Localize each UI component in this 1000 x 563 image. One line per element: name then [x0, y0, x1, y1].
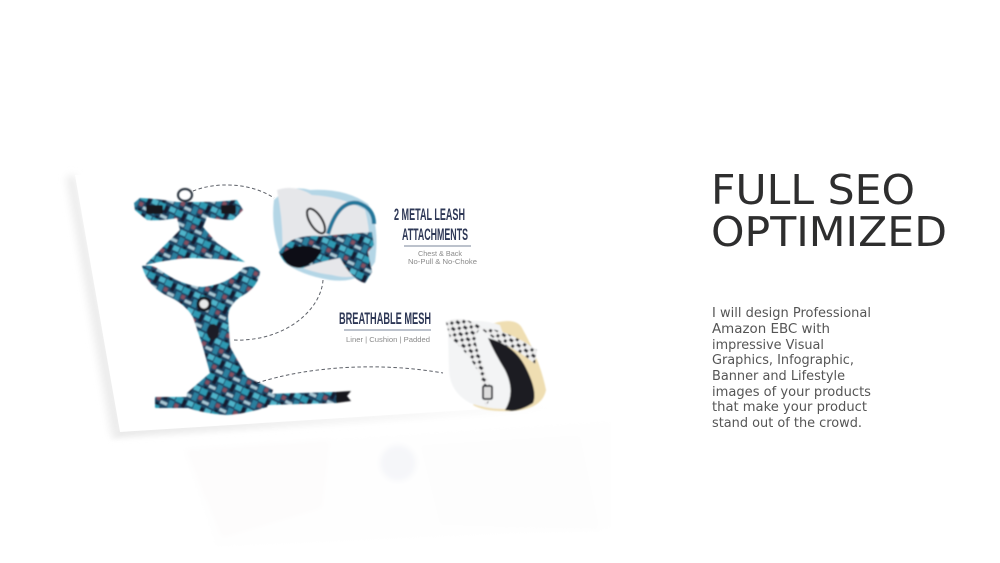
black padded mesh — [281, 246, 322, 268]
buckle — [483, 386, 492, 399]
handle — [198, 298, 210, 310]
harness body — [142, 266, 273, 415]
metal ring — [178, 189, 192, 201]
harness buckles — [146, 205, 163, 214]
detail photo: breathable mesh — [446, 319, 546, 411]
body text — [712, 306, 871, 431]
title: OPTIMIZED — [711, 208, 947, 256]
faded reflection of the product card — [182, 420, 612, 548]
body text: Banner and Lifestyle — [712, 369, 845, 384]
product card — [66, 170, 580, 438]
feature heading: metal leash — [394, 205, 468, 244]
yellow blob — [473, 321, 546, 411]
feature heading: metal leash: ATTACHMENTS — [402, 225, 468, 244]
feature subtext: metal leash — [408, 249, 477, 266]
body text: Amazon EBC with — [712, 322, 830, 337]
strap arch — [328, 203, 374, 234]
zebra harness right — [480, 328, 537, 364]
chest ring — [207, 324, 219, 340]
side buckle — [336, 391, 351, 403]
zebra harness left — [446, 319, 492, 408]
body text: stand out of the crowd. — [712, 416, 862, 431]
title: FULL SEO — [711, 166, 915, 214]
card side shadow — [66, 176, 124, 438]
body text: that make your product — [712, 400, 867, 415]
body text: impressive Visual — [712, 338, 824, 353]
divider — [344, 329, 431, 331]
divider — [404, 245, 471, 247]
harness illustration — [134, 189, 351, 415]
feature subtext: metal leash: No-Pull & No-Choke — [408, 257, 477, 266]
body text: Graphics, Infographic, — [712, 353, 854, 368]
feature heading: breathable mesh: BREATHABLE MESH — [339, 309, 431, 328]
harness belt right — [266, 392, 337, 405]
body text: images of your products — [712, 385, 871, 400]
title — [711, 166, 947, 256]
dashed connector lines — [193, 185, 443, 383]
harness upper strap — [134, 198, 245, 265]
card bottom shadow — [112, 402, 560, 438]
feature heading: metal leash: 2 METAL LEASH — [394, 205, 465, 224]
black leash ring — [303, 206, 329, 236]
body text: I will design Professional — [712, 306, 871, 321]
detail photo: leash attachment — [273, 188, 376, 283]
black mesh — [488, 338, 534, 411]
blue blob — [273, 188, 376, 281]
harness belt left — [155, 397, 189, 408]
feature subtext: metal leash: Chest & Back — [418, 249, 462, 258]
feature subtext: breathable mesh: Liner | Cushion | Padded — [346, 335, 430, 344]
grey blob — [448, 321, 530, 409]
grey blob — [277, 188, 369, 277]
card surface — [75, 170, 580, 432]
harness detail — [279, 232, 374, 283]
